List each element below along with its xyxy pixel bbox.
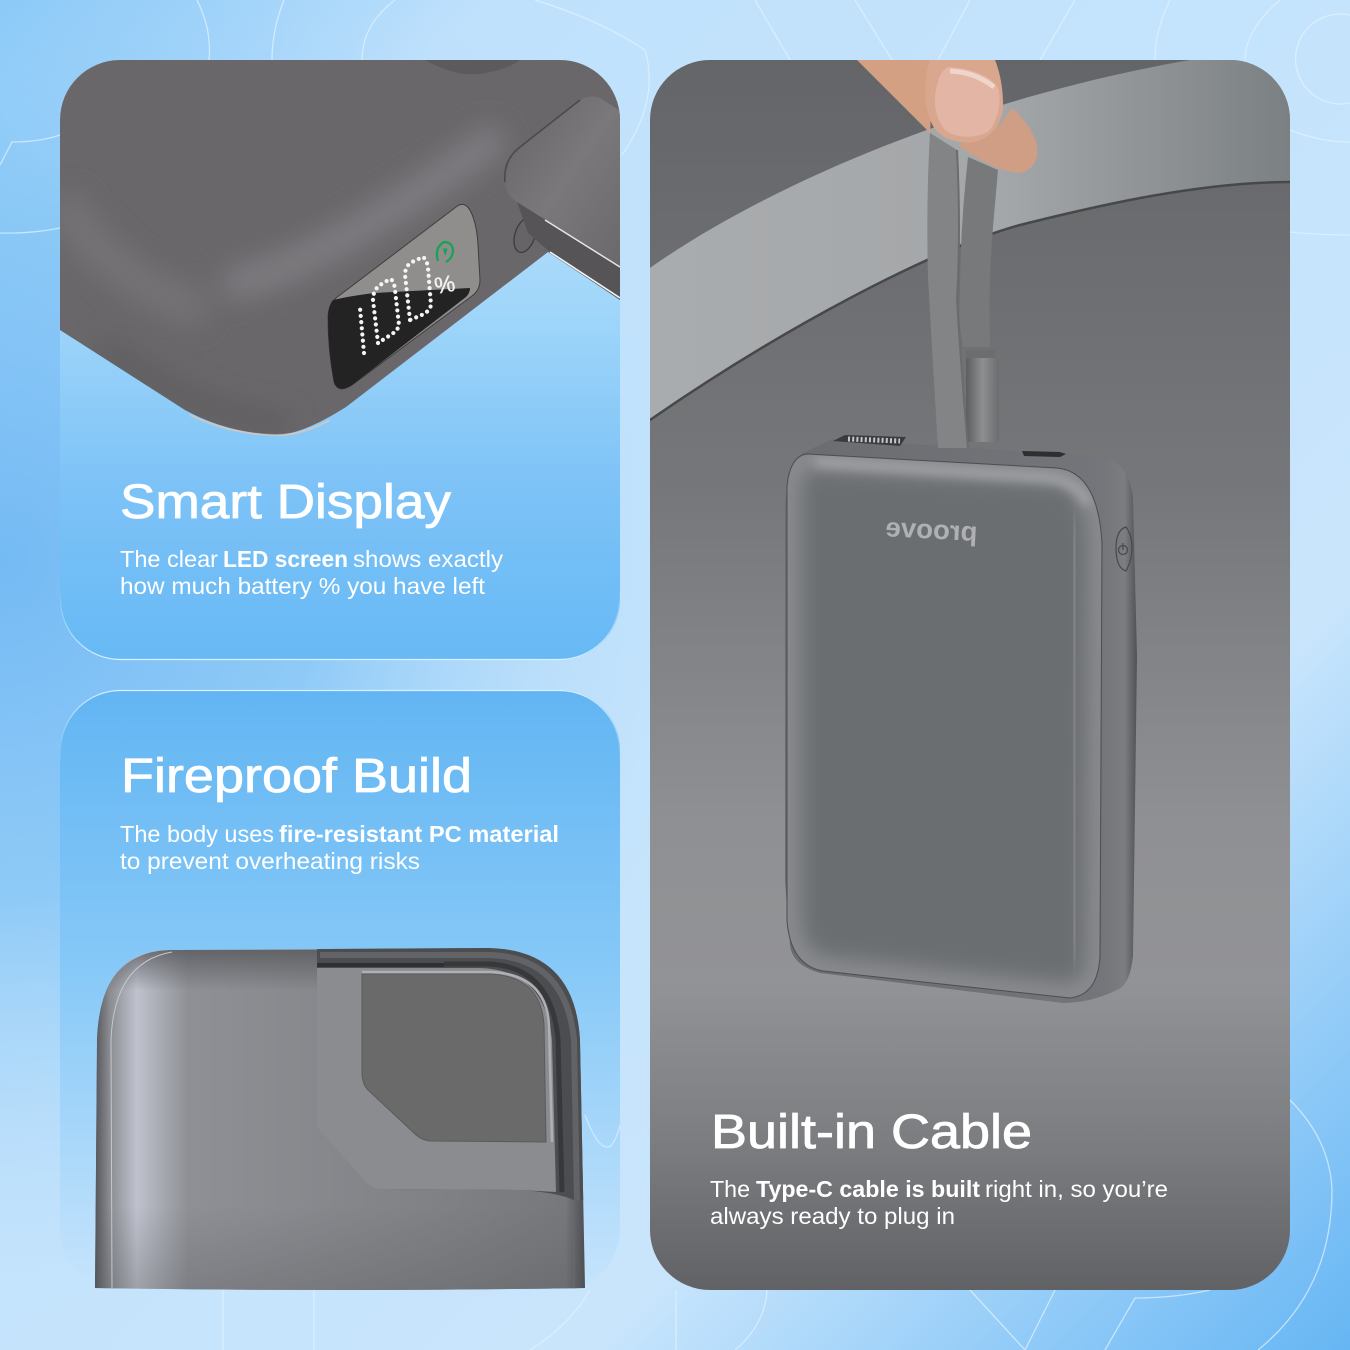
- description: Smart Display: how much battery % you have left: [120, 573, 486, 599]
- description: Smart Display: [120, 546, 504, 599]
- description: Smart Display: The clear: [120, 546, 218, 572]
- LED screen: [328, 204, 480, 389]
- description: Fireproof Build: fire-resistant PC material: [279, 821, 559, 847]
- power bank corner cutaway: [95, 945, 585, 1290]
- panel: Fireproof Build: [60, 690, 620, 1290]
- description: Built-in Cable: always ready to plug in: [710, 1203, 955, 1229]
- 100 digits: [360, 257, 431, 353]
- description: Built-in Cable: The: [710, 1176, 750, 1202]
- description: Fireproof Build: [120, 821, 559, 874]
- USB-C port: [1022, 451, 1066, 457]
- description: Fireproof Build: The body uses: [120, 821, 274, 847]
- description: Smart Display: LED screen: [223, 546, 348, 572]
- upper body shoulder: [95, 1002, 584, 1290]
- panel: Smart Display: [60, 60, 622, 660]
- description: Built-in Cable: Type-C cable is built: [756, 1176, 980, 1202]
- power bank: [780, 435, 1137, 1010]
- description: Fireproof Build: to prevent overheating risks: [120, 848, 420, 874]
- heading: Built-in Cable: Built-in Cable: [711, 1106, 1032, 1159]
- heading: Smart Display: Smart Display: [120, 476, 451, 529]
- device surface highlights: [60, 135, 500, 425]
- power bank close-up with LED screen: [60, 60, 622, 435]
- curved light band: [650, 60, 1290, 420]
- description: Built-in Cable: right in, so you’re: [985, 1176, 1168, 1202]
- heading: Fireproof Build: Fireproof Build: [121, 750, 472, 803]
- body shell: [785, 439, 1137, 1003]
- power button: [1116, 527, 1132, 571]
- vent grille: [833, 435, 906, 446]
- dark rim: [317, 948, 585, 1200]
- port: [513, 219, 535, 254]
- stored cable recess: [362, 974, 546, 1142]
- face edge line: [787, 454, 1102, 998]
- panel: Built-in Cable: [650, 60, 1290, 1290]
- cable loop: [927, 133, 999, 448]
- logo: proove: [885, 512, 978, 547]
- hand pinching the cable: [857, 60, 1037, 173]
- description: Built-in Cable: [710, 1176, 1168, 1229]
- Type-C connector: [505, 96, 622, 300]
- percent sign: %: [432, 270, 457, 299]
- charging icon: [437, 242, 453, 262]
- top bump: [425, 60, 520, 74]
- description: Smart Display: shows exactly: [353, 546, 504, 572]
- cable strap channel: [317, 968, 556, 1192]
- front face: [780, 450, 1110, 1010]
